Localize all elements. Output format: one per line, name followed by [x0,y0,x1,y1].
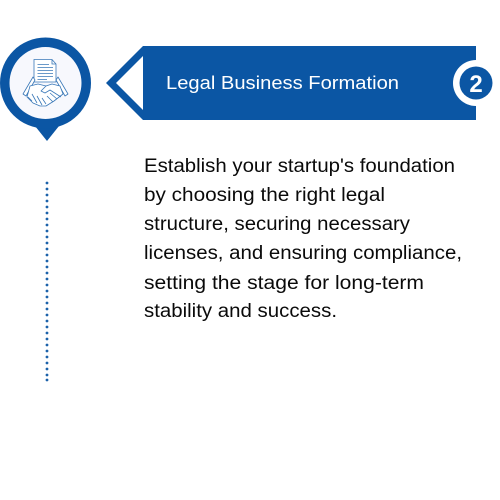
arrow notch [106,46,143,120]
body text [144,156,462,322]
banner title: Legal Business Formation [166,72,399,93]
step number badge: 2 [469,71,483,98]
dotted timeline [46,182,48,381]
icon badge: handshake and document [0,38,91,141]
body text: licenses, and ensuring compliance, [144,243,462,264]
body text: by choosing the right legal [144,185,385,206]
icon: handshake [23,77,68,106]
body text: setting the stage for long-term [144,273,424,294]
banner [106,46,476,120]
step number badge [453,60,499,106]
body text: structure, securing necessary [144,214,411,235]
icon: document [34,60,56,82]
body text: stability and success. [144,301,337,322]
body text: Establish your startup's foundation [144,156,455,177]
banner bar [143,46,476,120]
